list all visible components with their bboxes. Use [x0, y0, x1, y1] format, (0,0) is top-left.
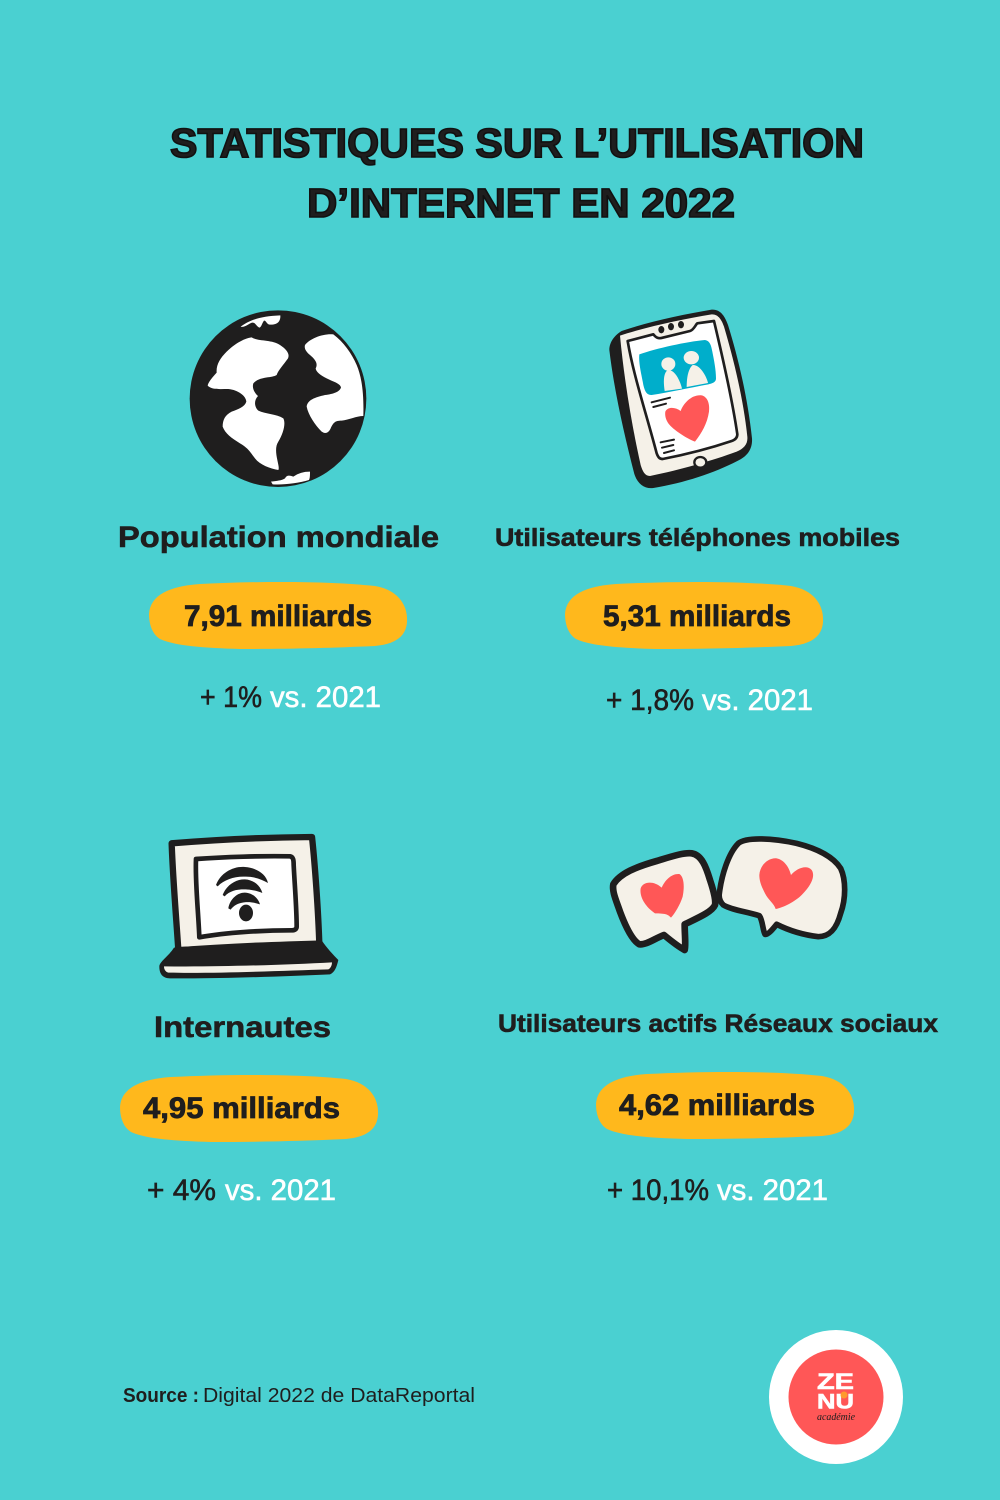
change vs 2021: vs. 2021: [702, 684, 813, 717]
change vs 2021: [200, 681, 381, 714]
heading: Internautes: [154, 1011, 331, 1044]
change vs 2021: vs. 2021: [270, 681, 381, 714]
heading: Population mondiale: [118, 521, 439, 554]
change vs 2021: [607, 1174, 828, 1207]
value pill: [149, 582, 407, 649]
source: Digital 2022 de DataReportal: [203, 1385, 475, 1407]
value pill: [596, 1072, 854, 1139]
change vs 2021: + 1,8%: [606, 684, 694, 717]
icon: globe: [190, 310, 366, 487]
panel: utilisateurs telephones mobiles: [495, 310, 900, 717]
change vs 2021: vs. 2021: [225, 1174, 336, 1207]
icon: speech bubbles with hearts: [613, 839, 845, 950]
heading: Utilisateurs actifs Réseaux sociaux: [498, 1010, 938, 1038]
heading: Utilisateurs téléphones mobiles: [495, 524, 900, 552]
change vs 2021: + 10,1%: [607, 1174, 709, 1207]
value pill: 5,31 milliards: [603, 600, 791, 633]
panel: utilisateurs actifs reseaux sociaux: [498, 839, 938, 1207]
source: Source :: [123, 1385, 199, 1407]
icon: smartphone: [609, 310, 752, 488]
value pill: 7,91 milliards: [184, 600, 372, 633]
logo: Zenu academie: [769, 1330, 903, 1464]
value pill: 4,62 milliards: [619, 1089, 815, 1122]
change vs 2021: + 4%: [147, 1174, 216, 1207]
panel: population mondiale: [118, 310, 439, 714]
panel: internautes: [120, 837, 378, 1207]
change vs 2021: [147, 1174, 336, 1207]
title: D’INTERNET EN 2022: [307, 180, 735, 226]
value pill: 4,95 milliards: [143, 1092, 340, 1125]
value pill: [565, 582, 823, 649]
change vs 2021: vs. 2021: [717, 1174, 828, 1207]
logo: Zenu academie: NU: [817, 1390, 854, 1414]
value pill: [120, 1075, 378, 1142]
logo: Zenu academie: académie: [817, 1412, 856, 1423]
change vs 2021: [606, 684, 813, 717]
icon: laptop with wifi: [159, 837, 338, 978]
logo: Zenu academie: ZE: [817, 1369, 854, 1394]
title: [170, 120, 864, 226]
title: STATISTIQUES SUR L’UTILISATION: [170, 120, 864, 166]
change vs 2021: + 1%: [200, 681, 262, 714]
